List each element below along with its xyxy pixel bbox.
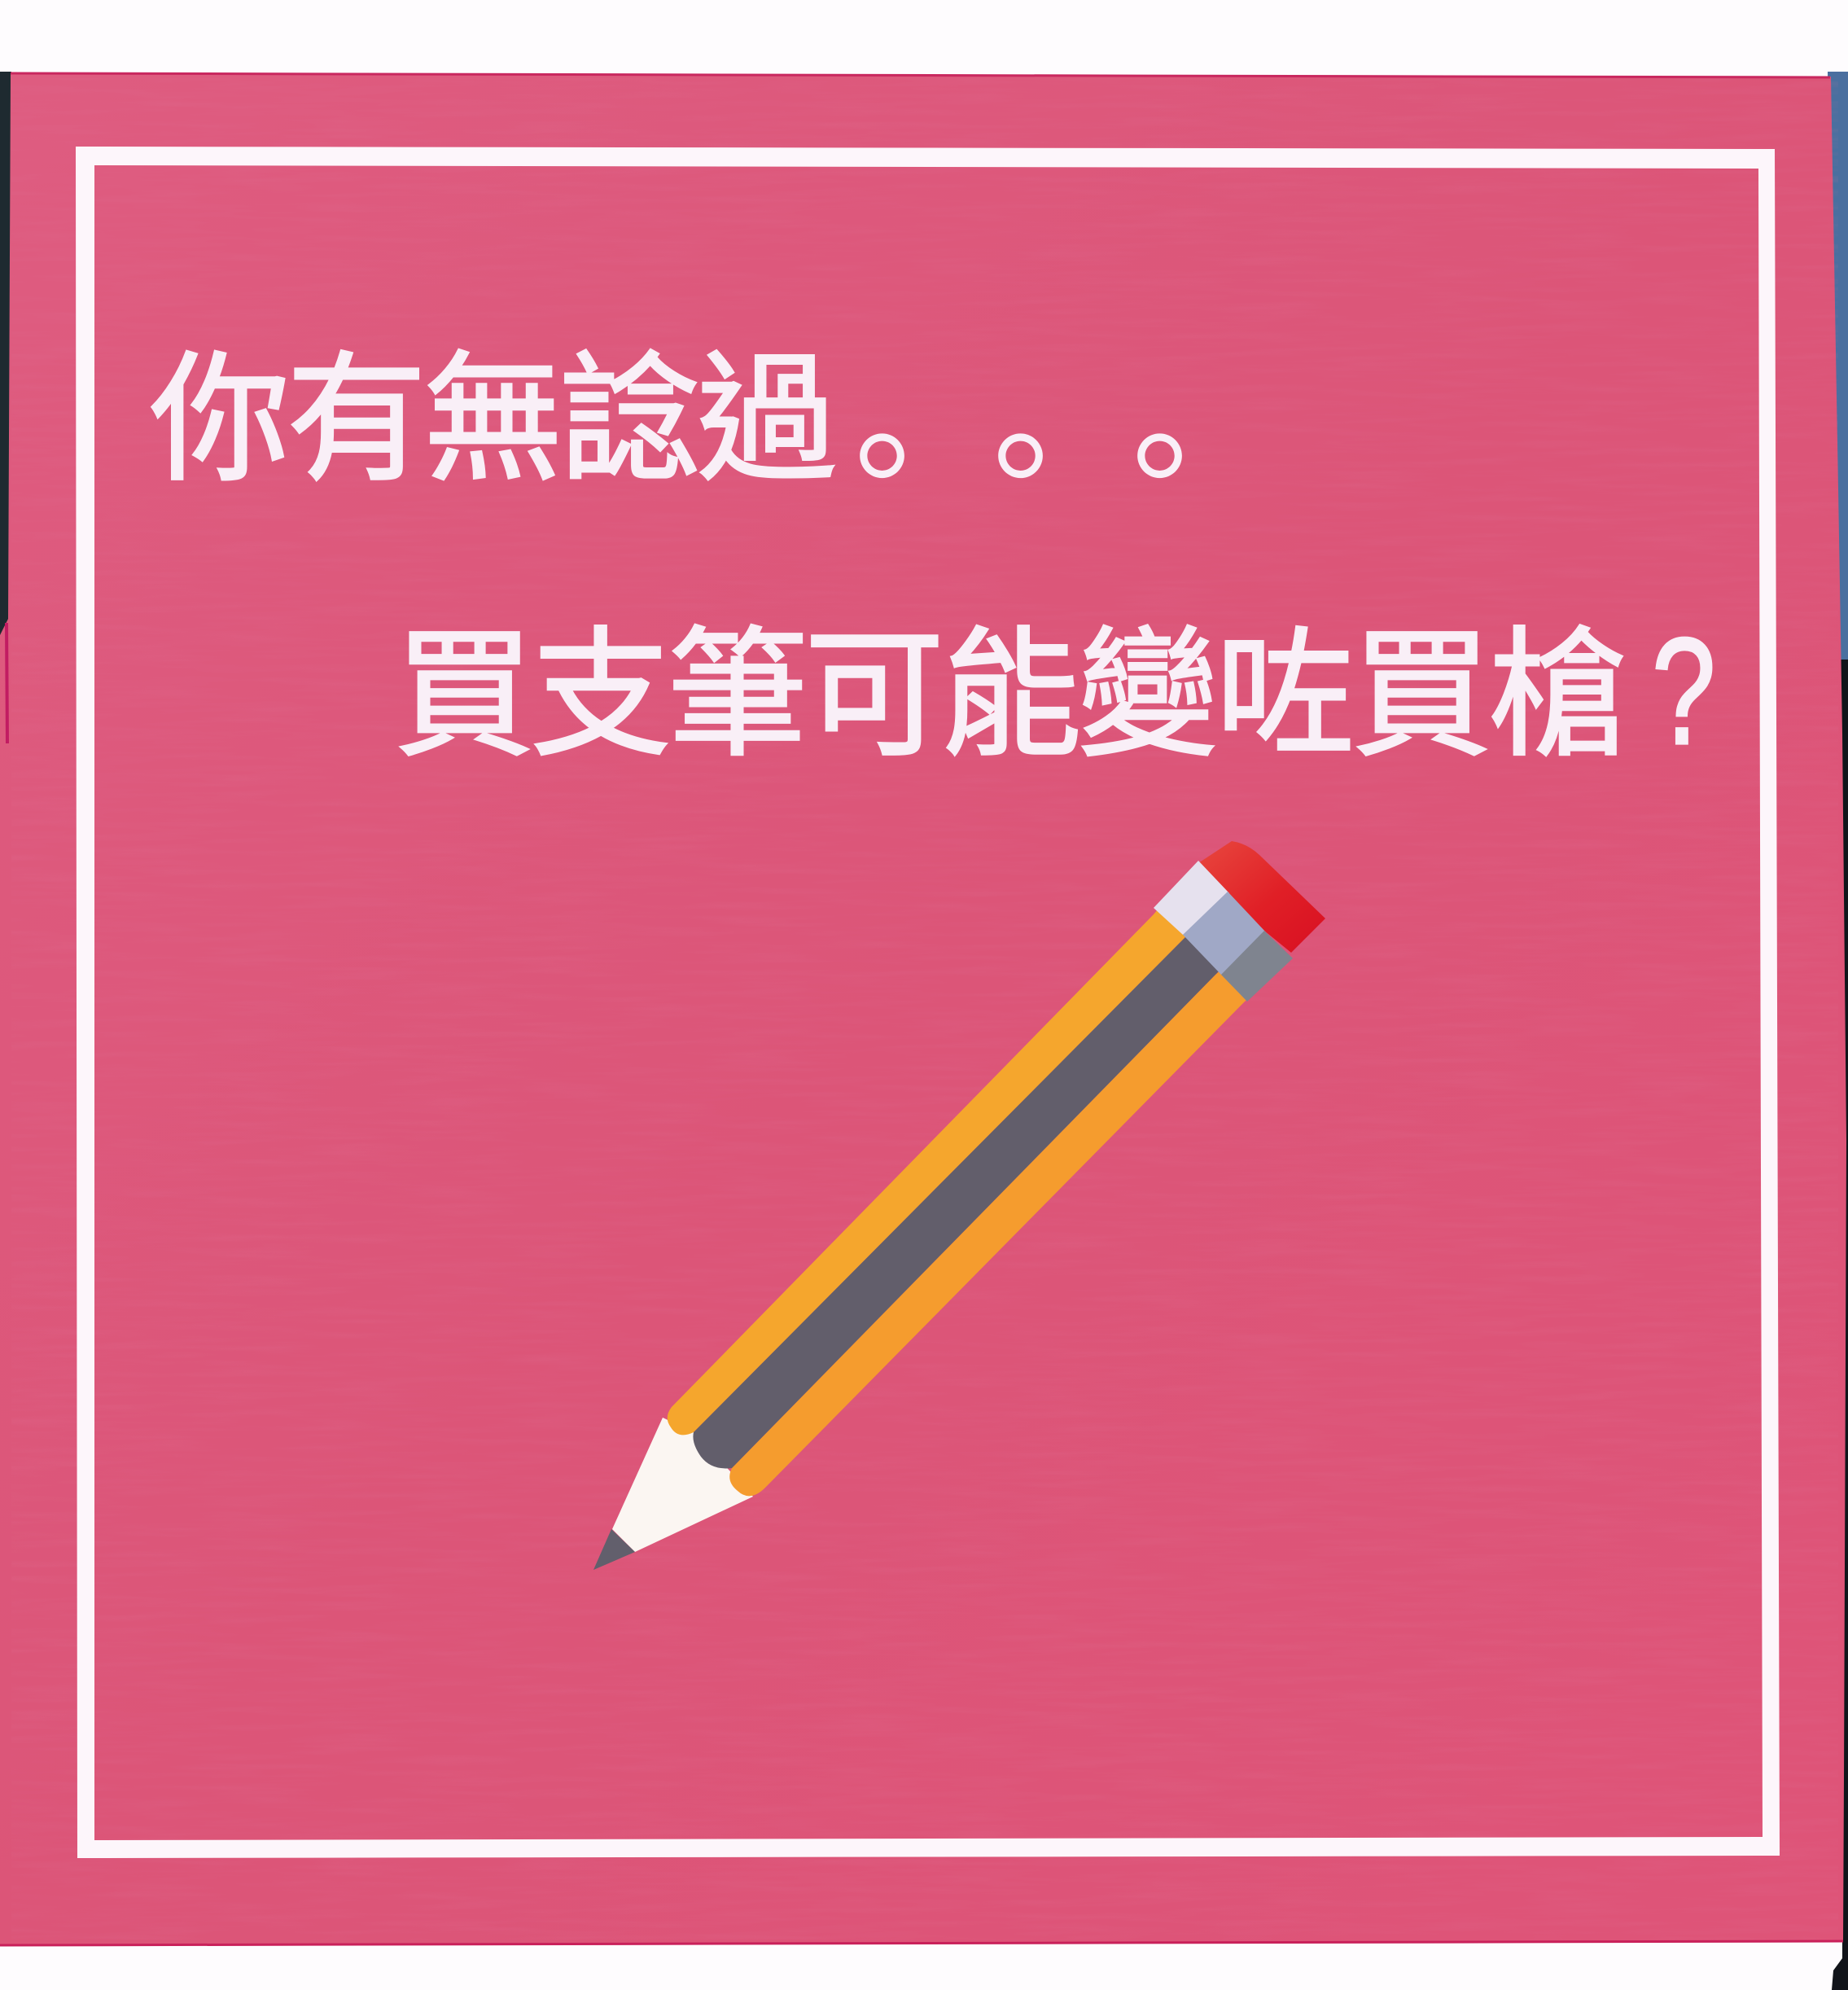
panel bottom edge <box>0 1941 1843 1945</box>
left black edge strip <box>0 72 11 643</box>
white frame <box>76 147 1780 1858</box>
heading line 1: 你有無諗過 <box>150 342 837 498</box>
question mark: ? <box>1652 607 1715 775</box>
right blue edge strip <box>1828 72 1848 664</box>
pencil body lower stripe <box>729 967 1252 1496</box>
ellipsis of three circles: 。。。 <box>808 379 1233 543</box>
ferrule mid band <box>1183 892 1266 975</box>
ferrule light band <box>1154 861 1229 935</box>
eraser <box>1198 841 1325 953</box>
pencil graphite point <box>593 1529 635 1570</box>
icon: pencil <box>593 841 1325 1570</box>
pencil body upper stripe <box>668 904 1192 1435</box>
pencil wood tip <box>612 1418 753 1552</box>
title text <box>150 342 1715 775</box>
ferrule dark band <box>1221 931 1293 1002</box>
right black edge strip <box>1832 660 1848 1990</box>
heading line 2: 買支筆可能變咗買槍 <box>394 617 1628 774</box>
pencil body dark centre stripe <box>693 932 1223 1468</box>
panel top edge <box>11 73 1830 77</box>
